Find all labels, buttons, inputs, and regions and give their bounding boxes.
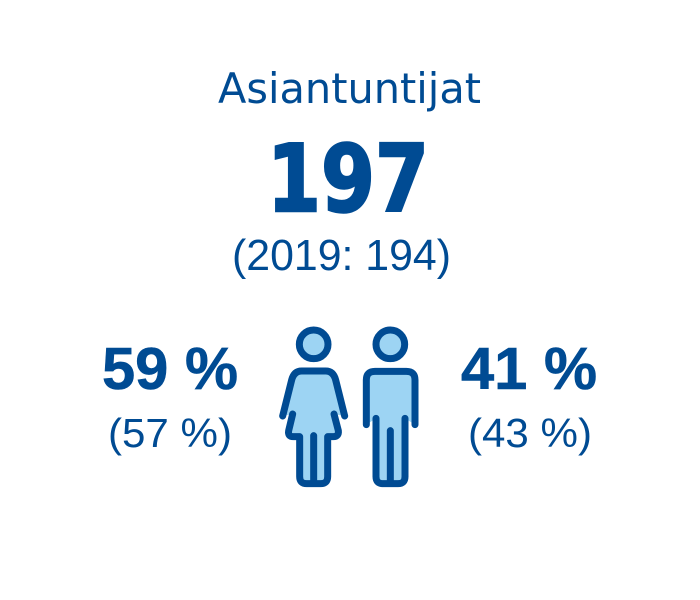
women previous share: (57 %)	[108, 410, 232, 456]
men previous share: (43 %)	[468, 410, 592, 456]
previous year total: (2019: 194)	[232, 231, 451, 280]
women share: 59 %	[102, 336, 238, 402]
icon: man	[366, 330, 415, 484]
icon: woman	[283, 330, 345, 484]
total number: 197	[267, 125, 429, 233]
men share: 41 %	[461, 336, 597, 402]
title: Asiantuntijat	[218, 64, 481, 113]
